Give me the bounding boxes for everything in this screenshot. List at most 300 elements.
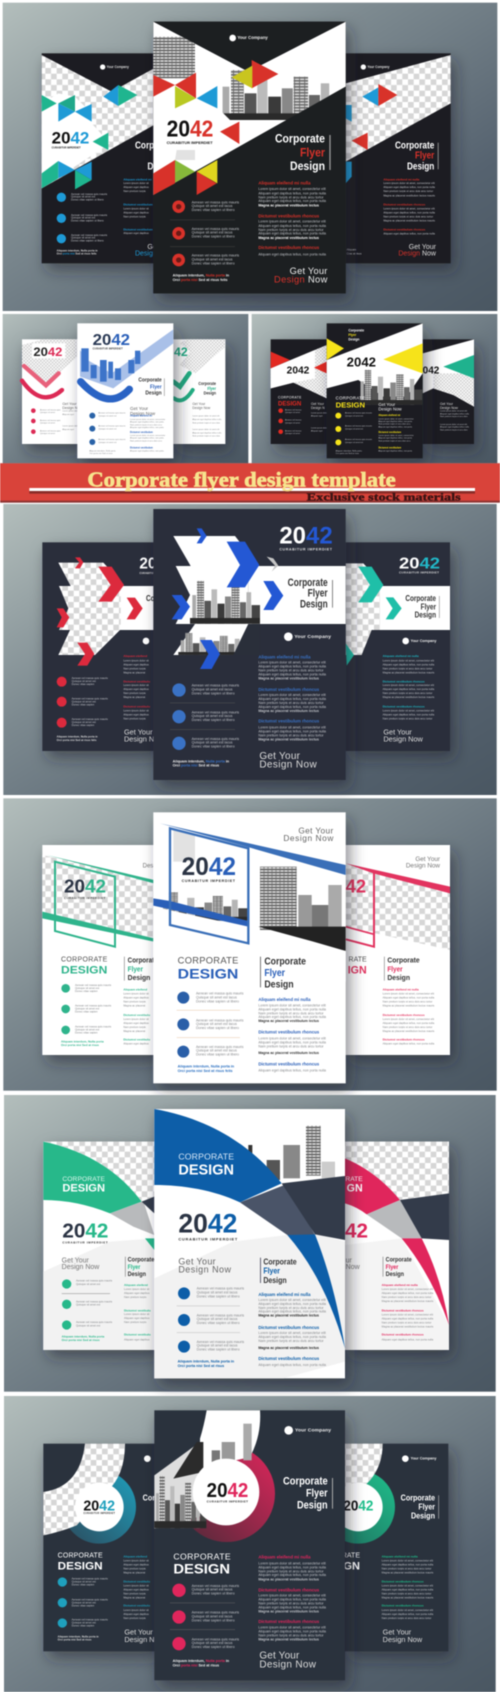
flyer: center blue chevrons: Magna ac placerat vestibulum lectus (258, 737, 319, 741)
title: Flyer (300, 146, 325, 160)
flyer: left green: Lorem ipsum dolor sit (124, 1312, 150, 1316)
flyer: right pink: Corporate (386, 1257, 412, 1264)
heading: DESIGN (178, 1162, 234, 1178)
call to action: Design Now (259, 1660, 317, 1671)
flyer: left red chevrons: Orci porta nisi Sed at risus felis (57, 738, 97, 742)
flyer: right green: Lorem ipsum dolor sit amet elit (192, 428, 220, 431)
flyer: left green: Orci porta nisi Sed at risus (62, 1338, 100, 1342)
flyer: left green: Orci porta nisi Sed at risus (61, 1043, 99, 1047)
flyer: right red: Magna ac placerat vestibulum lectus mauris (383, 194, 436, 198)
flyer: center blue: Nam pretium turpis et arcu duis arcu tortor (258, 1011, 324, 1015)
flyer: right pink: GN (347, 1183, 363, 1195)
call to action (259, 1651, 317, 1671)
flyer: center blue: Magna ac placerat vestibulum lectus (258, 1019, 319, 1023)
flyer: left teal: Aliquam eget dapibus (123, 185, 150, 189)
flyer: center black yellow: Aliquam eget dapibus tellus, non porta (378, 437, 413, 440)
flyer: left teal: Dictumst vestibulum (123, 227, 153, 231)
panel: white flyers with outlined frames (3, 798, 497, 1091)
flyer: right teal chevrons: Aliquam eget dapibus tellus, non porta nulla (383, 712, 435, 716)
flyer: right teal chevrons: CURABITUR IMPERDIET (399, 571, 439, 575)
flyer: right pink: Magna ac placerat vestibulum lectus mauris (382, 1325, 434, 1329)
flyer: center pink ring: Nam pretium turpis et arcu duis arcu tortor (258, 1569, 324, 1573)
flyer: left green (42, 845, 158, 1055)
flyer: right green ring: 2042 (343, 1497, 373, 1514)
flyer: center black yellow: Dictumst vestibulum (378, 447, 401, 450)
flyer: left red chevrons: Donec vitae sapien (72, 723, 95, 727)
flyer: center pink ring: Aenean vel massa quis mauris (192, 1637, 239, 1641)
flyer: center black yellow: Aenean vel massa quis mauris (345, 412, 372, 415)
title: Corporate (263, 1256, 297, 1266)
flyer: center blue: CURABITUR IMPERDIET (93, 347, 123, 350)
flyer: center blue (153, 812, 346, 1083)
flyer: left red chevrons: Quisque sit amet est (72, 679, 96, 683)
flyer: center blue: Aenean vel massa quis mauris (98, 412, 125, 415)
heading (178, 1151, 234, 1178)
flyer: left teal: Orci porta nisi Sed at risus felis (57, 252, 97, 256)
flyer: center blue (77, 323, 173, 458)
column text: Dictumst vestibulum rhoncus (258, 245, 320, 250)
flyer: center blue chevrons: Nam pretium turpis et arcu duis arcu tortor (258, 733, 324, 737)
flyer: right black green: Lorem ipsum dolor sit amet elit (440, 423, 467, 426)
flyer: left black red: Aenean vel massa (285, 429, 302, 432)
title: Flyer (308, 588, 328, 600)
flyer: left teal ring: Dictumst vestibulu (123, 1604, 150, 1608)
flyer: center black yellow: Nam pretium turpis et arcu duis arcu (378, 439, 410, 442)
flyer: center blue: Dictumst vestibulum rhoncus (258, 1356, 320, 1361)
flyer: left pink: Aliquam eget (62, 428, 74, 431)
banner subtitle: Exclusive stock materials (307, 493, 461, 504)
flyer: right pink (346, 845, 450, 1055)
flyer: right pink: Nam pretium turpis et arcu duis arcu tortor (382, 1321, 432, 1325)
flyer: center blue chevrons: Aliquam eleifend mi nulla (258, 654, 311, 659)
flyer: center pink ring: CURABITUR IMPERDIET (207, 1499, 248, 1503)
call to action: Design Now (274, 275, 328, 285)
column text: Dictumst vestibulum rhoncus (258, 213, 320, 218)
logo: Your Company (295, 1428, 331, 1434)
flyer: left red chevrons: Aliquam eget dapibus (123, 662, 150, 666)
flyer: center blue chevrons: Lorem ipsum dolor sit amet, consectetur elit (258, 660, 326, 664)
flyer: right pink: Magna ac placerat vestibulum lectus mauris (383, 1029, 435, 1033)
flyer: left green: Aliquam eleifend (123, 987, 147, 991)
flyer: left teal: Aenean vel massa quis mauris (71, 233, 108, 237)
flyer: left green: Aenean vel massa quis mauris (75, 983, 112, 987)
column text: Magna ac placerat vestibulum lectus (258, 236, 319, 240)
flyer: center pink ring: Dictumst vestibulum rhoncus (258, 1588, 320, 1593)
title: Flyer (306, 1487, 328, 1499)
title: Design (297, 1500, 328, 1512)
flyer: left black red: Design N (311, 406, 325, 410)
flyer: left black red: Lorem ipsum dolor (311, 411, 328, 414)
logo (284, 1426, 331, 1435)
flyer: left green: Dictumst vestibulu (123, 1037, 150, 1041)
flyer: center blue chevrons: Aenean vel massa quis mauris (192, 737, 239, 741)
flyer: right green: Design Now (192, 406, 211, 410)
flyer: center blue: Aliquam eget dapibus tellus, non porta nulla (258, 1335, 326, 1339)
flyer: center blue: Donec vitae sapien ut libero (196, 999, 239, 1003)
flyer: center blue chevrons: Aenean vel massa quis mauris (192, 684, 239, 688)
flyer: center blue: Design (145, 390, 162, 396)
flyer: right pink: Design (386, 1271, 404, 1278)
flyer: left red chevrons (42, 542, 177, 751)
flyer: left green: Lorem ipsum dolor sit (123, 991, 149, 995)
flyer: left teal ring: Aenean vel massa quis mauris (72, 1597, 109, 1601)
icons (172, 683, 186, 750)
flyer: left pink: Design N (62, 406, 78, 410)
flyer: center blue: Magna ac placerat vestibulum lectus (258, 1051, 319, 1055)
flyer: center black yellow: Orci porta nisi Sed at risus (336, 452, 359, 455)
flyer: center blue: Dictumst vestibulum (130, 431, 153, 434)
flyer: center black yellow: DESIGN (336, 400, 365, 409)
flyer: left teal: 2042 (52, 128, 89, 147)
flyer: center blue: Lorem ipsum dolor sit amet, consectetur (130, 434, 166, 437)
flyer: center blue chevrons: Lorem ipsum dolor sit amet, consectetur elit (258, 693, 326, 697)
flyer: left red chevrons: Quisque sit amet est (72, 720, 96, 724)
flyer: left red chevrons: Get Your (124, 727, 153, 736)
flyer: center pink ring: Lorem ipsum dolor sit amet, consectetur elit (258, 1594, 326, 1598)
flyer: right green ring: GN (344, 1560, 360, 1572)
flyer: center blue: Nam pretium turpis et arcu duis arcu tortor (258, 1306, 324, 1310)
column text: Aliquam eget dapibus tellus, non porta nulla (258, 253, 326, 257)
flyer: center blue: Quisque sit amet est (98, 415, 117, 418)
flyer: center blue chevrons: Nam pretium turpis et arcu duis arcu tortor (258, 669, 324, 673)
list text: Aenean vel massa quis mauris (192, 254, 239, 258)
panel: dark flyers with rings (4, 1396, 496, 1692)
flyer: left green: Aliquam eget dapibus (124, 1316, 150, 1320)
flyer: right green: Design (204, 390, 216, 395)
flyer: left teal: Dictumst vestibulum (123, 203, 153, 207)
flyer: center blue chevrons: Lorem ipsum dolor sit amet, consectetur elit (258, 725, 326, 729)
flyer: left teal: Donec vitae sapien ut libero (71, 218, 104, 222)
flyer: right black green (423, 339, 474, 444)
flyer: right green: Aliquam eget dapibus tellus nulla (192, 431, 222, 434)
flyer: left teal ring: Aliquam eleifend (123, 1554, 147, 1558)
number 2042: 2042 (207, 1480, 248, 1502)
flyer: center pink ring: Donec vitae sapien ut libero (192, 1645, 235, 1649)
flyer: center black yellow: Quisque sit amet est (345, 415, 364, 418)
flyer: left green: Quisque sit amet est (75, 986, 99, 990)
flyer: center black yellow: CORPORATE (336, 395, 365, 400)
flyer: left green: DESIGN (61, 964, 107, 976)
flyer: center black yellow: Dictumst vestibulum (378, 431, 401, 434)
flyer: right teal chevrons: Corporate (405, 594, 436, 603)
flyer: left teal ring: Donec vitae sapien (72, 1583, 95, 1587)
flyer: center blue: Aliquam eleifend mi nulla (258, 997, 311, 1002)
flyer: left red chevrons: Magna ac placerat (123, 695, 145, 699)
flyer: center blue: Aliquam eleifend mi nulla (258, 1292, 311, 1297)
flyer: center black yellow: Get Your (378, 402, 396, 407)
flyer: right pink: Lorem ipsum dolor sit amet, consectetur elit (382, 1287, 433, 1291)
flyer: left green: Nam pretium turpis (124, 1320, 147, 1324)
flyer: right teal chevrons: Nam pretium turpis et arcu duis arcu tortor (383, 691, 433, 695)
column text: Lorem ipsum dolor sit amet, consectetur elit (258, 220, 326, 224)
flyer: left red chevrons: Aliquam eleifend (123, 654, 147, 658)
flyer: left black red: 2042 (287, 365, 310, 376)
flyer: center pink ring: Magna ac placerat vestibulum lectus (258, 1609, 319, 1613)
flyer: right black green: Nam pretium turpis et arcu duis (440, 428, 468, 431)
flyer: left green: DESIGN (62, 1183, 105, 1195)
flyer: right green ring: Aliquam eleifend mi nulla (382, 1554, 418, 1558)
flyer: center pink ring: Lorem ipsum dolor sit amet, consectetur elit (258, 1625, 326, 1629)
flyer: left pink: Aliquam eget (62, 413, 74, 416)
banner (0, 463, 500, 504)
flyer: left green: Donec vitae sapien (75, 1031, 98, 1035)
flyer: right green ring: RATE (342, 1553, 360, 1560)
flyer: right teal chevrons: Aliquam eget dapibus tellus, non porta nulla (383, 662, 435, 666)
flyer: center black yellow: Quisque sit amet est (345, 441, 364, 444)
flyer: right pink: Aliquam eget dapibus tellus, non porta nulla (383, 1041, 435, 1045)
flyer: left teal ring: Lorem ipsum dolor sit (123, 1583, 149, 1587)
flyer: center blue: Dictumst vestibulum rhoncus (258, 1030, 320, 1035)
flyer: left green: CURABITUR IMPERDIET (64, 896, 106, 900)
flyer: left black red: Aenean vel massa (285, 408, 302, 411)
bottom note: Orci porta nisi Sed at risus felis (173, 278, 228, 282)
flyer: right green: Aliquam eget dapibus tellus nulla (192, 418, 222, 421)
flyer: right teal chevrons: Aliquam eget dapibus tellus, non porta nulla (383, 687, 435, 691)
flyer: right pink (345, 1142, 449, 1350)
flyer: left teal: Your Company (107, 65, 129, 69)
flyer: left red chevrons: Aliquam interdum, Nulla porta in (57, 735, 98, 739)
flyer: left green: Aenean vel massa quis mauris (76, 1279, 113, 1283)
flyer: center blue: CURABITUR IMPERDIET (182, 879, 236, 883)
flyer: center pink ring: Magna ac placerat vestibulum lectus (258, 1637, 319, 1641)
call to action: Get Your (259, 751, 301, 762)
logo (284, 632, 331, 641)
flyer: left teal: Design (135, 251, 157, 258)
flyer: center blue: Quisque sit amet est lacus (197, 1290, 238, 1294)
flyer: center blue: Flyer (150, 384, 162, 390)
flyer: right green: Lorem ipsum dolor sit amet elit (192, 415, 220, 418)
flyer: right pink: RATE (345, 1176, 363, 1183)
flyer: center blue: Aenean vel massa quis mauris (196, 1018, 244, 1022)
flyer: center black yellow: Aliquam interdum, Nulla porta (336, 449, 363, 452)
flyer: center blue: Aliquam eget dapibus tellus, non porta nulla (258, 1068, 326, 1072)
flyer: left teal: Quisque sit amet est (71, 236, 95, 240)
heading: CORPORATE (178, 1151, 234, 1161)
flyer: center blue: Corporate (138, 378, 162, 384)
title: Corporate (288, 577, 328, 589)
flyer: center blue: Aliquam eget dapibus tellus, non porta nulla (258, 1310, 326, 1314)
flyer: left red chevrons: CURABITUR (139, 571, 155, 575)
flyer: left red chevrons: Dictumst vestibulu (123, 704, 150, 708)
call to action: Design Now (259, 760, 317, 771)
flyer: left teal: Aliquam interdum, Nulla porta in (57, 248, 98, 252)
flyer: left teal ring: Nam pretium turpis (123, 1591, 146, 1595)
flyer: center blue: Dictumst vestibulum rhoncus (258, 1061, 320, 1066)
right tower photo (258, 867, 346, 951)
flyer: center blue: Orci porta nisi Sed at risus (178, 1364, 224, 1368)
flyer: center black yellow: Aliquam eget dapibus tellus, non porta (378, 450, 413, 453)
call to action: Get Your (290, 266, 327, 276)
flyer: right pink: Aliquam eget dapibus tellus, non porta nulla (382, 1317, 434, 1321)
list text: Quisque sit amet est lacus (192, 257, 233, 261)
flyer: left teal: Nam pretium turpis (123, 189, 146, 193)
flyer: center blue: Donec vitae sapien ut libero (196, 1026, 239, 1030)
heading: CORPORATE (178, 955, 238, 965)
flyer: right green ring: Aliquam eget dapibus tellus, non porta nulla (382, 1612, 434, 1616)
flyer: left green: Aliquam eget dapibus (123, 1021, 150, 1025)
flyer: right pink: Corporate (387, 956, 420, 965)
flyer: center blue: Nam pretium turpis et arcu duis arcu (130, 423, 162, 426)
flyer: center blue: Quisque sit amet est lacus (196, 995, 237, 999)
flyer: left green: Design Now (62, 1264, 100, 1271)
flyer: left black red: Quisque sit amet (285, 421, 300, 424)
flyer: left green: Magna ac placerat (123, 1029, 145, 1033)
flyer: left black red: Lorem ipsum dolor (311, 426, 328, 429)
flyer: right teal chevrons: Design (415, 611, 436, 620)
flyer: center pink ring: Quisque sit amet est lacus (192, 1641, 233, 1645)
flyer: center pink ring: Donec vitae sapien ut libero (192, 1618, 235, 1622)
flyer: right black green: Get Your (440, 402, 454, 406)
flyer: left red chevrons: Lorem ipsum dolor sit (123, 683, 149, 687)
flyer: right teal chevrons (346, 542, 450, 751)
flyer: right pink: Lorem ipsum dolor sit amet, consectetur elit (383, 1017, 434, 1021)
flyer: left green: Magna ac placerat (123, 1003, 145, 1007)
flyer: center black yellow: Design (348, 338, 359, 342)
flyer: right green: 42 (174, 345, 188, 359)
flyer: left red chevrons: Donec vitae sapien (72, 682, 95, 686)
flyer: left green: Aenean vel massa quis mauris (76, 1299, 113, 1303)
flyer: left teal ring: Aliquam eget dapibus (123, 1563, 150, 1567)
chevrons (172, 528, 283, 669)
flyer: center blue chevrons: Magna ac placerat vestibulum lectus (258, 677, 319, 681)
flyer: left green: Aliquam interdum, Nulla porta (62, 1334, 105, 1338)
flyer: right pink: Dictumst vestibulum rhoncus (383, 1013, 425, 1017)
flyer: center blue: Lorem ipsum dolor sit amet, consectetur elit (258, 1036, 326, 1040)
flyer: right teal chevrons: Aliquam eleifend mi nulla (383, 654, 419, 658)
list text: Aenean vel massa quis mauris (192, 200, 239, 204)
flyer: left red chevrons: Quisque sit amet est (72, 699, 96, 703)
flyer: center blue chevrons: Aliquam eget dapibus tellus, non porta nulla (258, 697, 326, 701)
flyer: center blue chevrons: Quisque sit amet est lacus (192, 714, 233, 718)
flyer: center blue: Aliquam interdum, Nulla porta in (178, 1065, 234, 1069)
flyer: center blue: Donec vitae sapien ut libero (197, 1348, 240, 1352)
flyer: right green: Corporate (198, 381, 216, 386)
flyer: left red chevrons: Aenean vel massa quis mauris (72, 717, 109, 721)
flyer: left pink: Lorem ipsum dolor (62, 425, 79, 428)
flyer: right red: Aliquam (347, 248, 357, 252)
column text: Nam pretium turpis et arcu duis arcu tortor (258, 195, 324, 199)
flyer: left green: Aenean vel massa quis mauris (75, 1004, 112, 1008)
flyer: left green: Aenean vel massa quis mauris (76, 1320, 113, 1324)
flyer: center blue chevrons: Aliquam eget dapibus tellus, non porta nulla (258, 672, 326, 676)
flyer: center blue: Magna ac placerat vestibulum lectus (258, 1314, 319, 1318)
flyer: right teal chevrons: Get Your (383, 728, 412, 737)
flyer: center pink ring: Magna ac placerat vestibulum lectus (258, 1577, 319, 1581)
flyer: left green: Aenean vel massa quis mauris (75, 1025, 112, 1029)
flyer: left black red: Aenean vel massa (285, 419, 302, 422)
column text: Nam pretium turpis et arcu duis arcu tortor (258, 228, 324, 232)
flyer: left teal: Donec vitae sapien ut libero (71, 238, 104, 242)
flyer: left black red: Quisque sit amet (285, 411, 300, 414)
flyer: center blue: Aenean vel massa quis mauris (98, 438, 125, 441)
flyer: left teal: Corporate (135, 140, 175, 151)
flyer: left black red: Quisque sit amet (285, 432, 300, 435)
flyer: left green: Quisque sit amet est (76, 1282, 100, 1286)
flyer: center black yellow: Aliquam eget dapibus tellus, non porta (378, 420, 413, 423)
call to action: Get Your (178, 1256, 216, 1266)
flyer: left pink: Get Your (62, 402, 77, 406)
flyer: center blue: Quisque sit amet est (98, 428, 117, 431)
title: Corporate (264, 956, 306, 967)
title (264, 956, 306, 990)
flyer: left red chevrons: Design Now (124, 734, 164, 743)
flyer: right pink: Aliquam eget dapibus tellus, non porta nulla (382, 1291, 434, 1295)
flyer: left black red (271, 339, 328, 444)
flyer: right teal chevrons: Lorem ipsum dolor sit amet, consectetur elit (383, 658, 434, 662)
flyer: center blue (154, 1109, 345, 1378)
flyer: right pink: Magna ac placerat vestibulum lectus mauris (382, 1299, 434, 1303)
column text: Aliquam eget dapibus tellus, non porta nulla (258, 191, 326, 195)
flyer: center blue: Aenean vel massa quis mauris (197, 1287, 244, 1291)
flyer: center blue chevrons: Donec vitae sapien ut libero (192, 691, 235, 695)
flyer: left teal: Aenean vel massa quis mauris (71, 213, 108, 217)
flyer: right green ring: Flyer (418, 1502, 436, 1512)
flyer: right black green: Nam pretium turpis et arcu duis (440, 415, 468, 418)
flyer: left pink: Aenean vel massa quis (40, 430, 61, 433)
flyer: right pink: Magna ac placerat vestibulum lectus mauris (383, 1003, 435, 1007)
heading: CORPORATE (173, 1552, 231, 1562)
flyer: left black red: DESIGN (278, 401, 301, 407)
flyer: right red: Corporate (395, 140, 435, 151)
flyer: right pink: Nam pretium turpis et arcu duis arcu tortor (382, 1295, 432, 1299)
panel: white flyers with curves (4, 1095, 496, 1392)
flyer: left teal: Design (147, 161, 176, 172)
flyer: right pink: Flyer (386, 1264, 399, 1271)
flyer: right teal chevrons: Dictumst vestibulum rhoncus (383, 679, 425, 683)
flyer: center black yellow: Flyer (348, 333, 357, 337)
call to action: Design Now (178, 1264, 231, 1274)
flyer: right red: Design Now (398, 251, 437, 258)
flyer: left teal: Quisque sit amet est (71, 216, 95, 220)
flyer: right red: Nam pretium turpis et arcu duis arcu tortor (383, 189, 433, 193)
title: Corporate (283, 1475, 328, 1487)
flyer: left green: Aliquam eleifend (124, 1283, 148, 1287)
flyer: center blue: Orci porta nisi Sed at risus felis (178, 1069, 233, 1073)
call to action (283, 825, 334, 843)
flyer: left green: Flyer (128, 965, 143, 974)
flyer: left teal: CURABITUR IMPERDIET (52, 146, 81, 149)
flyer: center pink ring: Aliquam eleifend mi nulla (258, 1555, 311, 1560)
flyer: center black yellow: Aenean vel massa quis mauris (345, 425, 372, 428)
flyer: left red chevrons: Lorem ipsum dolor sit (123, 658, 149, 662)
title (283, 1475, 333, 1512)
flyer: left teal ring: Donec vitae sapien (72, 1624, 95, 1628)
flyer: center pink ring: Lorem ipsum dolor sit amet, consectetur elit (258, 1561, 326, 1565)
flyer: left teal: Aliquam eget dapibus (123, 231, 150, 235)
flyer: center pink ring: Aliquam eget dapibus tellus, non porta nulla (258, 1598, 326, 1602)
flyer: left teal ring: 2042 (83, 1497, 115, 1514)
flyer: right pink: IGN (348, 964, 367, 976)
flyer: right red: Get Your (409, 244, 437, 251)
flyer: center blue: Quisque sit amet est lacus (196, 1022, 237, 1026)
list text: Donec vitae sapien ut libero (192, 208, 235, 212)
flyer: right pink: Flyer (387, 965, 403, 974)
flyer: left teal ring: Quisque sit amet est (72, 1600, 96, 1604)
flyer: right green ring: Magna ac placerat vestibulum lectus mauris (382, 1571, 434, 1575)
flyer: left teal ring: Aliquam eget dapibus (123, 1612, 150, 1616)
flyer: right pink: 42 (346, 876, 366, 897)
flyer: center pink ring: Quisque sit amet est lacus (192, 1588, 233, 1592)
flyer: left red chevrons: Dictumst vestibulu (123, 679, 150, 683)
flyer: left green: Dictumst vestibulu (123, 1013, 150, 1017)
flyer: left teal ring: Donec vitae sapien (72, 1603, 95, 1607)
flyer: left red chevrons: Aenean vel massa quis mauris (72, 676, 109, 680)
flyer: center blue chevrons: Quisque sit amet est lacus (192, 687, 233, 691)
title: Flyer (263, 1266, 280, 1276)
flyer: right green ring: Dictumst vestibulum rhoncus (382, 1604, 424, 1608)
flyer: center blue: Aliquam eget dapibus tellus, non porta nulla (258, 1302, 326, 1306)
flyer: left red chevrons: Corporate (146, 594, 177, 603)
